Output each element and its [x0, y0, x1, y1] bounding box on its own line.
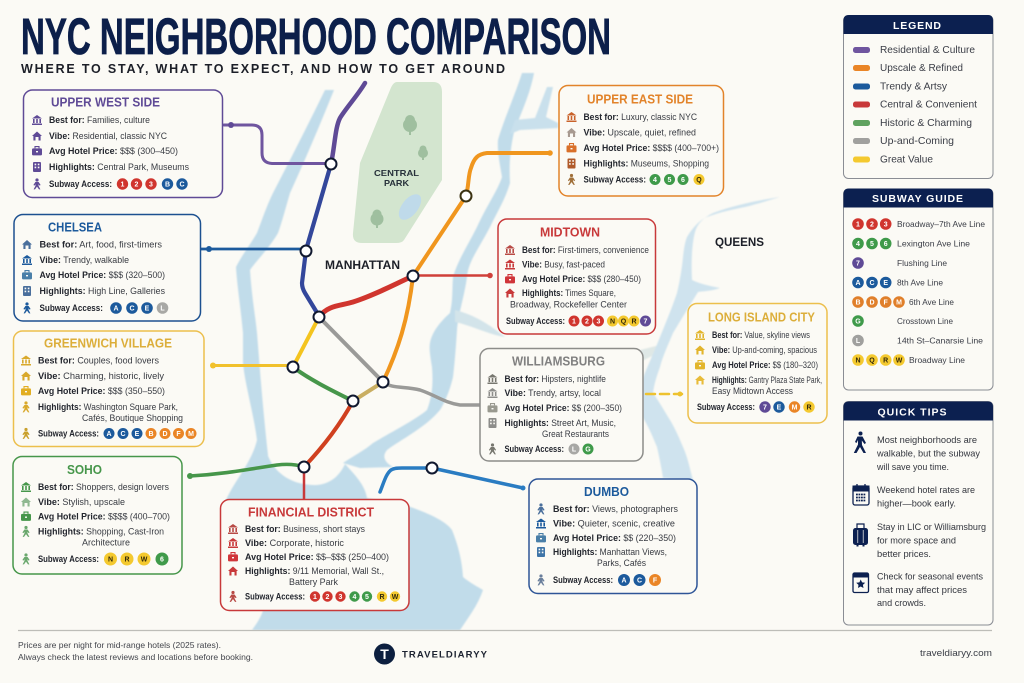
panel: SoHo	[13, 456, 182, 574]
tip: stay in LIC: Stay in LIC or Williamsburg	[877, 521, 986, 532]
tip: stay in LIC: better prices.	[877, 548, 931, 559]
details: Avg Hotel Price: $$$ (350–550)	[38, 386, 165, 396]
line L: 14th St–Canarsie Line	[897, 336, 983, 346]
line: Upper West Side trunk	[331, 83, 365, 164]
subway badges: 1	[121, 182, 125, 188]
subway badges	[759, 401, 815, 413]
subway badges	[568, 444, 594, 454]
legend entries: Trendy & Artsy	[880, 82, 948, 92]
subway badges: F	[176, 431, 181, 438]
line A C E: 8th Ave Line	[897, 278, 943, 288]
subway badges: E	[135, 431, 140, 438]
details: Avg Hotel Price: $$$ (280–450)	[522, 274, 641, 284]
details: Subway Access:	[38, 428, 99, 438]
line 4 5 6: 4	[856, 241, 860, 248]
panel: DUMBO	[529, 479, 697, 594]
tip: seasonal events	[853, 570, 983, 608]
subway badges	[568, 316, 651, 326]
tip: weekend rates	[853, 484, 975, 508]
park area	[353, 82, 442, 243]
subway badges: W	[141, 556, 148, 564]
subway badges: N	[108, 556, 113, 564]
tip: walking: will save you time.	[876, 461, 949, 472]
legend entries	[853, 45, 977, 166]
card frame	[14, 331, 204, 446]
line: red-orange	[304, 401, 353, 467]
line B D F M: B	[855, 300, 861, 306]
subway badges: W	[392, 594, 399, 601]
details	[488, 374, 622, 454]
line 4 5 6: Lexington Ave Line	[897, 238, 970, 248]
subway badges	[618, 574, 661, 586]
Hudson River	[226, 90, 334, 500]
subway badges: B	[148, 431, 154, 438]
subway badges: M	[188, 431, 194, 438]
details: Vibe: Up-and-coming, spacious	[712, 345, 818, 355]
logo mark: T	[380, 646, 389, 662]
details: Highlights: Street Art, Music,	[504, 418, 616, 428]
details	[32, 115, 190, 189]
tip: walking: Most neighborhoods are	[877, 434, 977, 445]
tip: seasonal events: and crowds.	[877, 597, 926, 608]
line: tan connector	[353, 382, 383, 401]
heading: CHELSEA	[48, 220, 102, 234]
details: Highlights: 9/11 Memorial, Wall St.,	[245, 566, 384, 576]
tip: weekend rates: higher—book early.	[877, 498, 956, 508]
East River	[343, 73, 534, 468]
subway badges: 7	[763, 404, 767, 412]
subway badges: M	[792, 404, 798, 412]
card frame	[498, 219, 656, 334]
heading: FINANCIAL DISTRICT	[248, 506, 374, 520]
details: Vibe: Residential, classic NYC	[49, 131, 168, 141]
map label: Manhattan: MANHATTAN	[325, 258, 400, 272]
line G: G	[855, 318, 861, 326]
line: red central	[319, 276, 413, 317]
panel: Chelsea	[14, 214, 200, 321]
lake	[394, 190, 426, 224]
line: orange lower	[383, 276, 413, 382]
line 1 2 3: 1	[856, 222, 860, 228]
subway badges: A	[106, 431, 112, 438]
panel: Long Island City	[688, 304, 827, 423]
details	[566, 112, 719, 185]
subway badges: 5	[668, 177, 672, 184]
subway badges: 1	[572, 318, 576, 326]
line: Chelsea branch	[201, 248, 306, 250]
line 1 2 3: 3	[884, 222, 888, 228]
details: Best for: Couples, food lovers	[38, 356, 160, 366]
line: orange upper	[413, 153, 550, 276]
panel frame	[844, 402, 993, 625]
panel header	[844, 188, 993, 208]
card frame	[220, 500, 409, 610]
footer note: Always check the latest reviews and locations before booking.	[18, 652, 253, 662]
card frame	[14, 214, 200, 321]
line 7	[852, 257, 947, 269]
subway badges: 6	[681, 177, 685, 184]
subway badges	[110, 302, 168, 314]
details: Best for: Shoppers, design lovers	[38, 482, 170, 492]
line N Q R W	[852, 354, 965, 366]
details: Highlights: Times Square,	[522, 288, 616, 298]
panel heading: SUBWAY GUIDE	[872, 193, 963, 205]
details	[695, 330, 822, 412]
details: Best for: Hipsters, nightlife	[504, 374, 606, 384]
line B D F M: M	[896, 300, 902, 306]
details: Broadway, Rockefeller Center	[510, 300, 627, 310]
details: Vibe: Corporate, historic	[245, 538, 345, 548]
subway badges: N	[610, 318, 615, 326]
subway badges: 5	[365, 594, 369, 601]
heading: SOHO	[67, 463, 102, 477]
panel header	[844, 15, 993, 34]
line: indigo trunk	[302, 164, 331, 316]
subway badges: 3	[339, 594, 343, 601]
line: gray diagonal	[319, 317, 383, 382]
legend entries: Upscale & Refined	[880, 63, 963, 74]
line B D F M: F	[884, 300, 889, 306]
line: Greenwich Village branch	[213, 364, 293, 367]
details: Highlights: Museums, Shopping	[584, 158, 709, 168]
footer logo	[374, 644, 488, 664]
subway badges	[650, 174, 704, 185]
subway badges: 2	[326, 594, 330, 601]
subway badges: L	[572, 446, 577, 454]
line: green	[293, 367, 353, 401]
heading: UPPER EAST SIDE	[587, 92, 693, 106]
details: Subway Access:	[504, 444, 564, 454]
label: Central Park: PARK	[384, 178, 409, 188]
label: Central Park: CENTRAL	[374, 168, 419, 178]
icon: suitcase	[853, 524, 868, 546]
line 1 2 3	[852, 218, 985, 230]
line B D F M: D	[869, 300, 875, 306]
subway badges: R	[379, 594, 385, 601]
tree	[403, 115, 417, 135]
line: yellow	[293, 317, 319, 367]
card frame	[13, 456, 182, 574]
line L: L	[856, 338, 861, 345]
details: Avg Hotel Price: $$ (200–350)	[504, 403, 622, 413]
line 1 2 3: 2	[870, 222, 874, 228]
label: Central Park	[374, 168, 419, 188]
details: Best for: Luxury, classic NYC	[584, 112, 698, 122]
details: Best for: Families, culture	[49, 115, 150, 125]
details: Great Restaurants	[542, 429, 610, 439]
tip: weekend rates: Weekend hotel rates are	[877, 484, 975, 495]
details: Highlights: Washington Square Park,	[38, 402, 178, 412]
heading: GREENWICH VILLAGE	[44, 336, 172, 350]
details: Subway Access:	[49, 179, 112, 189]
legend entries: Great Value	[880, 154, 933, 166]
panel: Upper East Side	[559, 86, 724, 196]
card frame	[480, 348, 643, 461]
line 1 2 3: Broadway–7th Ave Line	[897, 219, 985, 229]
line: Midtown branch	[413, 274, 490, 277]
subway lines	[190, 83, 682, 499]
details: Vibe: Stylish, upscale	[38, 497, 125, 507]
legend entries: Residential & Culture	[880, 45, 975, 56]
details: Avg Hotel Price: $$–$$$ (250–400)	[245, 552, 389, 562]
panel: quick tips	[844, 402, 993, 625]
panel: Greenwich Village	[14, 331, 204, 446]
subway badges: R	[124, 556, 130, 564]
details: Subway Access:	[38, 554, 99, 564]
line B D F M: 6th Ave Line	[909, 297, 954, 307]
details: Highlights: Gantry Plaza State Park,	[712, 375, 822, 385]
details: Best for: Views, photographers	[553, 504, 679, 514]
line 7: 7	[856, 260, 860, 268]
details: Avg Hotel Price: $$$$ (400–700+)	[584, 143, 719, 153]
subway badges: C	[637, 578, 642, 584]
details: Easy Midtown Access	[712, 386, 794, 396]
panel: legend	[844, 15, 993, 178]
subway badges: C	[129, 306, 135, 312]
subway badges	[117, 178, 188, 190]
Harlem River branch	[510, 87, 558, 134]
details: Vibe: Trendy, walkable	[40, 255, 129, 265]
line A C E: E	[883, 280, 888, 287]
details: Subway Access:	[245, 592, 305, 602]
subway badges: L	[160, 306, 165, 312]
details	[505, 245, 649, 326]
details: Avg Hotel Price: $$$ (300–450)	[49, 146, 178, 156]
line: DUMBO branch	[380, 468, 523, 492]
panel header	[844, 402, 993, 420]
details	[21, 356, 183, 439]
heading: DUMBO	[584, 485, 629, 499]
legend entries: Central & Convenient	[880, 100, 977, 110]
subway badges: C	[179, 182, 185, 188]
details: Avg Hotel Price: $$$ (320–500)	[40, 270, 165, 280]
creek at Williamsburg	[640, 345, 660, 362]
details	[21, 482, 170, 564]
details	[228, 524, 389, 602]
details: Cafés, Boutique Shopping	[82, 413, 183, 423]
panel heading: LEGEND	[893, 20, 941, 32]
map label: Queens: QUEENS	[715, 235, 764, 249]
tip: seasonal events: that may affect prices	[877, 584, 967, 595]
panel: Williamsburg	[480, 348, 643, 461]
heading: MIDTOWN	[540, 226, 600, 240]
details: Best for: Art, food, first-timers	[40, 240, 163, 250]
icon: walker	[854, 432, 866, 453]
subway badges: Q	[696, 177, 702, 184]
line N Q R W: W	[896, 358, 903, 364]
details: Architecture	[82, 538, 130, 548]
tree	[418, 146, 428, 160]
line: Long Island City dashed	[646, 393, 682, 395]
line N Q R W: R	[883, 358, 888, 364]
details: Avg Hotel Price: $$$$ (400–700)	[38, 512, 170, 522]
map: Central Park	[353, 82, 442, 243]
subway badges: E	[777, 404, 782, 412]
subway badges: Q	[621, 318, 627, 326]
line B D F M	[852, 296, 954, 308]
details: Highlights: Manhattan Views,	[553, 547, 667, 557]
subway badges: 3	[149, 182, 153, 188]
line: Williamsburg branch	[383, 382, 480, 405]
details: Best for: Value, skyline views	[712, 330, 810, 340]
subway badges	[310, 591, 400, 602]
tip: stay in LIC	[853, 521, 986, 559]
heading: WILLIAMSBURG	[512, 354, 605, 368]
subway badges	[104, 552, 168, 566]
line A C E: C	[869, 280, 875, 287]
line A C E: A	[855, 280, 861, 287]
subway badges: C	[120, 431, 126, 438]
details: Subway Access:	[506, 316, 565, 326]
subway badges: 2	[135, 182, 139, 188]
details: Vibe: Charming, historic, lively	[38, 371, 165, 381]
title: NYC NEIGHBORHOOD COMPARISON	[21, 8, 611, 65]
line 4 5 6	[852, 238, 970, 249]
panel: Financial District	[220, 500, 409, 610]
tip: walking: walkable, but the subway	[876, 448, 980, 458]
subway badges: 4	[353, 594, 357, 601]
subway badges: A	[621, 578, 627, 584]
Queens channel	[640, 197, 780, 480]
panel frame	[844, 189, 993, 390]
heading: UPPER WEST SIDE	[51, 96, 160, 110]
line: Upper West Side branch	[224, 125, 331, 164]
line A C E	[852, 277, 943, 288]
details: Best for: Business, short stays	[245, 524, 366, 534]
subway badges: 3	[597, 318, 601, 326]
details: Battery Park	[289, 577, 339, 587]
subway badges	[104, 428, 196, 439]
details: Parks, Cafés	[597, 558, 647, 568]
line 4 5 6: 6	[884, 241, 888, 248]
Newtown Creek branch	[455, 310, 505, 337]
panel: Upper West Side	[24, 90, 222, 198]
subway badges: 7	[644, 318, 648, 326]
line G: Crosstown Line	[897, 316, 953, 326]
details: Avg Hotel Price: $$ (220–350)	[553, 533, 676, 543]
New York Harbor	[222, 450, 483, 630]
subway badges: B	[165, 182, 170, 188]
subway badges: 2	[585, 318, 589, 326]
details: Vibe: Upscale, quiet, refined	[584, 128, 696, 138]
subway badges: 6	[160, 556, 164, 564]
card frame	[688, 304, 827, 423]
line L	[852, 335, 983, 346]
panel frame	[844, 16, 993, 178]
subtitle: WHERE TO STAY, WHAT TO EXPECT, AND HOW TO GET AROUND	[21, 62, 505, 76]
line 7: Flushing Line	[897, 258, 947, 268]
details: Highlights: Central Park, Museums	[49, 162, 190, 172]
legend entries: Up-and-Coming	[880, 136, 954, 147]
line G	[852, 315, 953, 327]
line: Financial District branch	[303, 467, 305, 499]
card frame	[24, 90, 222, 198]
details: Highlights: High Line, Galleries	[40, 286, 166, 296]
icon: event card	[853, 573, 868, 592]
card frame	[559, 86, 724, 196]
footer note: Prices are per night for mid-range hotels (2025 rates).	[18, 640, 221, 650]
details: Subway Access:	[553, 575, 613, 585]
line 4 5 6: 5	[870, 241, 874, 248]
subway badges: 1	[313, 594, 317, 601]
tree	[370, 210, 384, 228]
details: Subway Access:	[40, 303, 103, 313]
panel: Midtown	[498, 219, 656, 334]
details: Subway Access:	[584, 174, 646, 184]
brand name: TRAVELDIARYY	[402, 650, 488, 660]
details: Vibe: Busy, fast-paced	[522, 260, 605, 270]
subway badges: R	[631, 318, 637, 326]
details: Subway Access:	[697, 402, 755, 412]
legend entries: Historic & Charming	[880, 118, 972, 129]
heading: LONG ISLAND CITY	[708, 310, 816, 324]
subway stations	[288, 158, 472, 474]
subway badges: A	[113, 306, 119, 312]
panel: subway guide	[844, 188, 993, 390]
tip: seasonal events: Check for seasonal events	[877, 570, 983, 582]
line N Q R W: Broadway Line	[909, 355, 965, 365]
subway badges: 4	[653, 177, 657, 184]
line: Soho branch	[190, 464, 304, 476]
subway badges: R	[806, 404, 812, 412]
details: Vibe: Trendy, artsy, local	[504, 388, 601, 398]
subway badges: E	[145, 306, 150, 312]
details: Highlights: Shopping, Cast-Iron	[38, 526, 164, 536]
tip: walking	[854, 432, 980, 472]
tip: stay in LIC: for more space and	[877, 534, 956, 546]
line N Q R W: Q	[869, 358, 875, 364]
subway badges: F	[653, 578, 658, 584]
details: Vibe: Quieter, scenic, creative	[553, 518, 675, 528]
details	[22, 240, 166, 313]
subway badges: D	[162, 431, 168, 438]
footer note	[18, 640, 253, 662]
icon: calendar	[853, 484, 869, 505]
footer website: traveldiaryy.com	[920, 648, 992, 659]
map: waterways	[222, 73, 780, 630]
panel heading: QUICK TIPS	[878, 406, 946, 418]
line N Q R W: N	[855, 358, 861, 364]
details: Avg Hotel Price: $$ (180–320)	[712, 360, 818, 370]
subway badges: G	[585, 446, 591, 454]
card frame	[529, 479, 697, 594]
details	[536, 503, 679, 585]
details: Best for: First-timers, convenience	[522, 245, 649, 255]
line end dots	[187, 122, 682, 490]
